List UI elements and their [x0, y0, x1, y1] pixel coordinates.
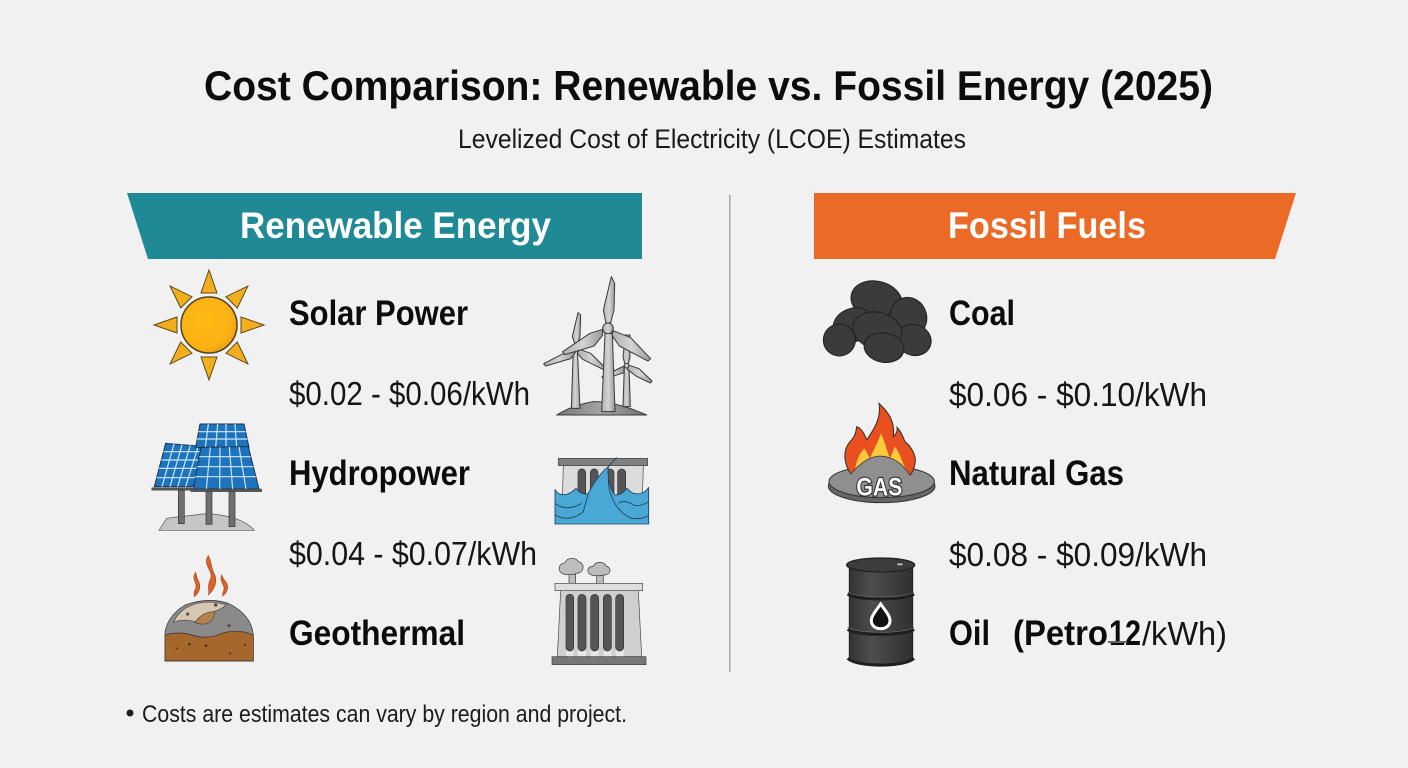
panel: renewable energy	[127, 193, 652, 665]
icon: gas flame	[828, 403, 935, 503]
icon: geothermal ground	[165, 556, 253, 661]
label: oil: (Petro	[1013, 614, 1108, 653]
label: oil: /kWh)	[1142, 615, 1227, 652]
subtitle: Levelized Cost of Electricity (LCOE) Estimates	[458, 124, 966, 154]
divider	[729, 195, 730, 672]
label: solar power: Solar Power	[289, 294, 468, 333]
icon: gas flame: GAS	[856, 474, 902, 502]
price: hydropower: $0.04 - $0.07/kWh	[289, 535, 537, 572]
label: oil: 12	[1109, 614, 1141, 653]
label: natural gas: Natural Gas	[949, 454, 1124, 493]
label: coal: Coal	[949, 294, 1015, 333]
banner: fossil fuels	[814, 193, 1296, 259]
price: solar power: $0.02 - $0.06/kWh	[289, 375, 530, 412]
banner: fossil fuels: Fossil Fuels	[948, 205, 1146, 246]
icon: oil barrel	[847, 558, 915, 666]
price: coal: $0.06 - $0.10/kWh	[949, 376, 1207, 413]
price: natural gas: $0.08 - $0.09/kWh	[949, 536, 1207, 573]
label: hydropower: Hydropower	[289, 454, 470, 493]
icon: hydro dam	[555, 457, 649, 524]
label: oil: Oil	[949, 614, 990, 653]
icon: coal	[823, 275, 936, 366]
footnote: Costs are estimates can vary by region and project.	[142, 701, 627, 728]
icon: sun	[154, 270, 264, 380]
label: geothermal: Geothermal	[289, 614, 465, 653]
banner: renewable energy: Renewable Energy	[240, 205, 551, 246]
title: Cost Comparison: Renewable vs. Fossil Energy (2025)	[204, 62, 1213, 109]
icon: wind turbines	[544, 277, 652, 415]
banner: renewable energy	[127, 193, 642, 259]
icon: solar panels	[152, 424, 262, 530]
panel: fossil fuels	[814, 193, 1296, 666]
label: oil	[949, 614, 1227, 653]
icon: power plant	[552, 558, 646, 665]
